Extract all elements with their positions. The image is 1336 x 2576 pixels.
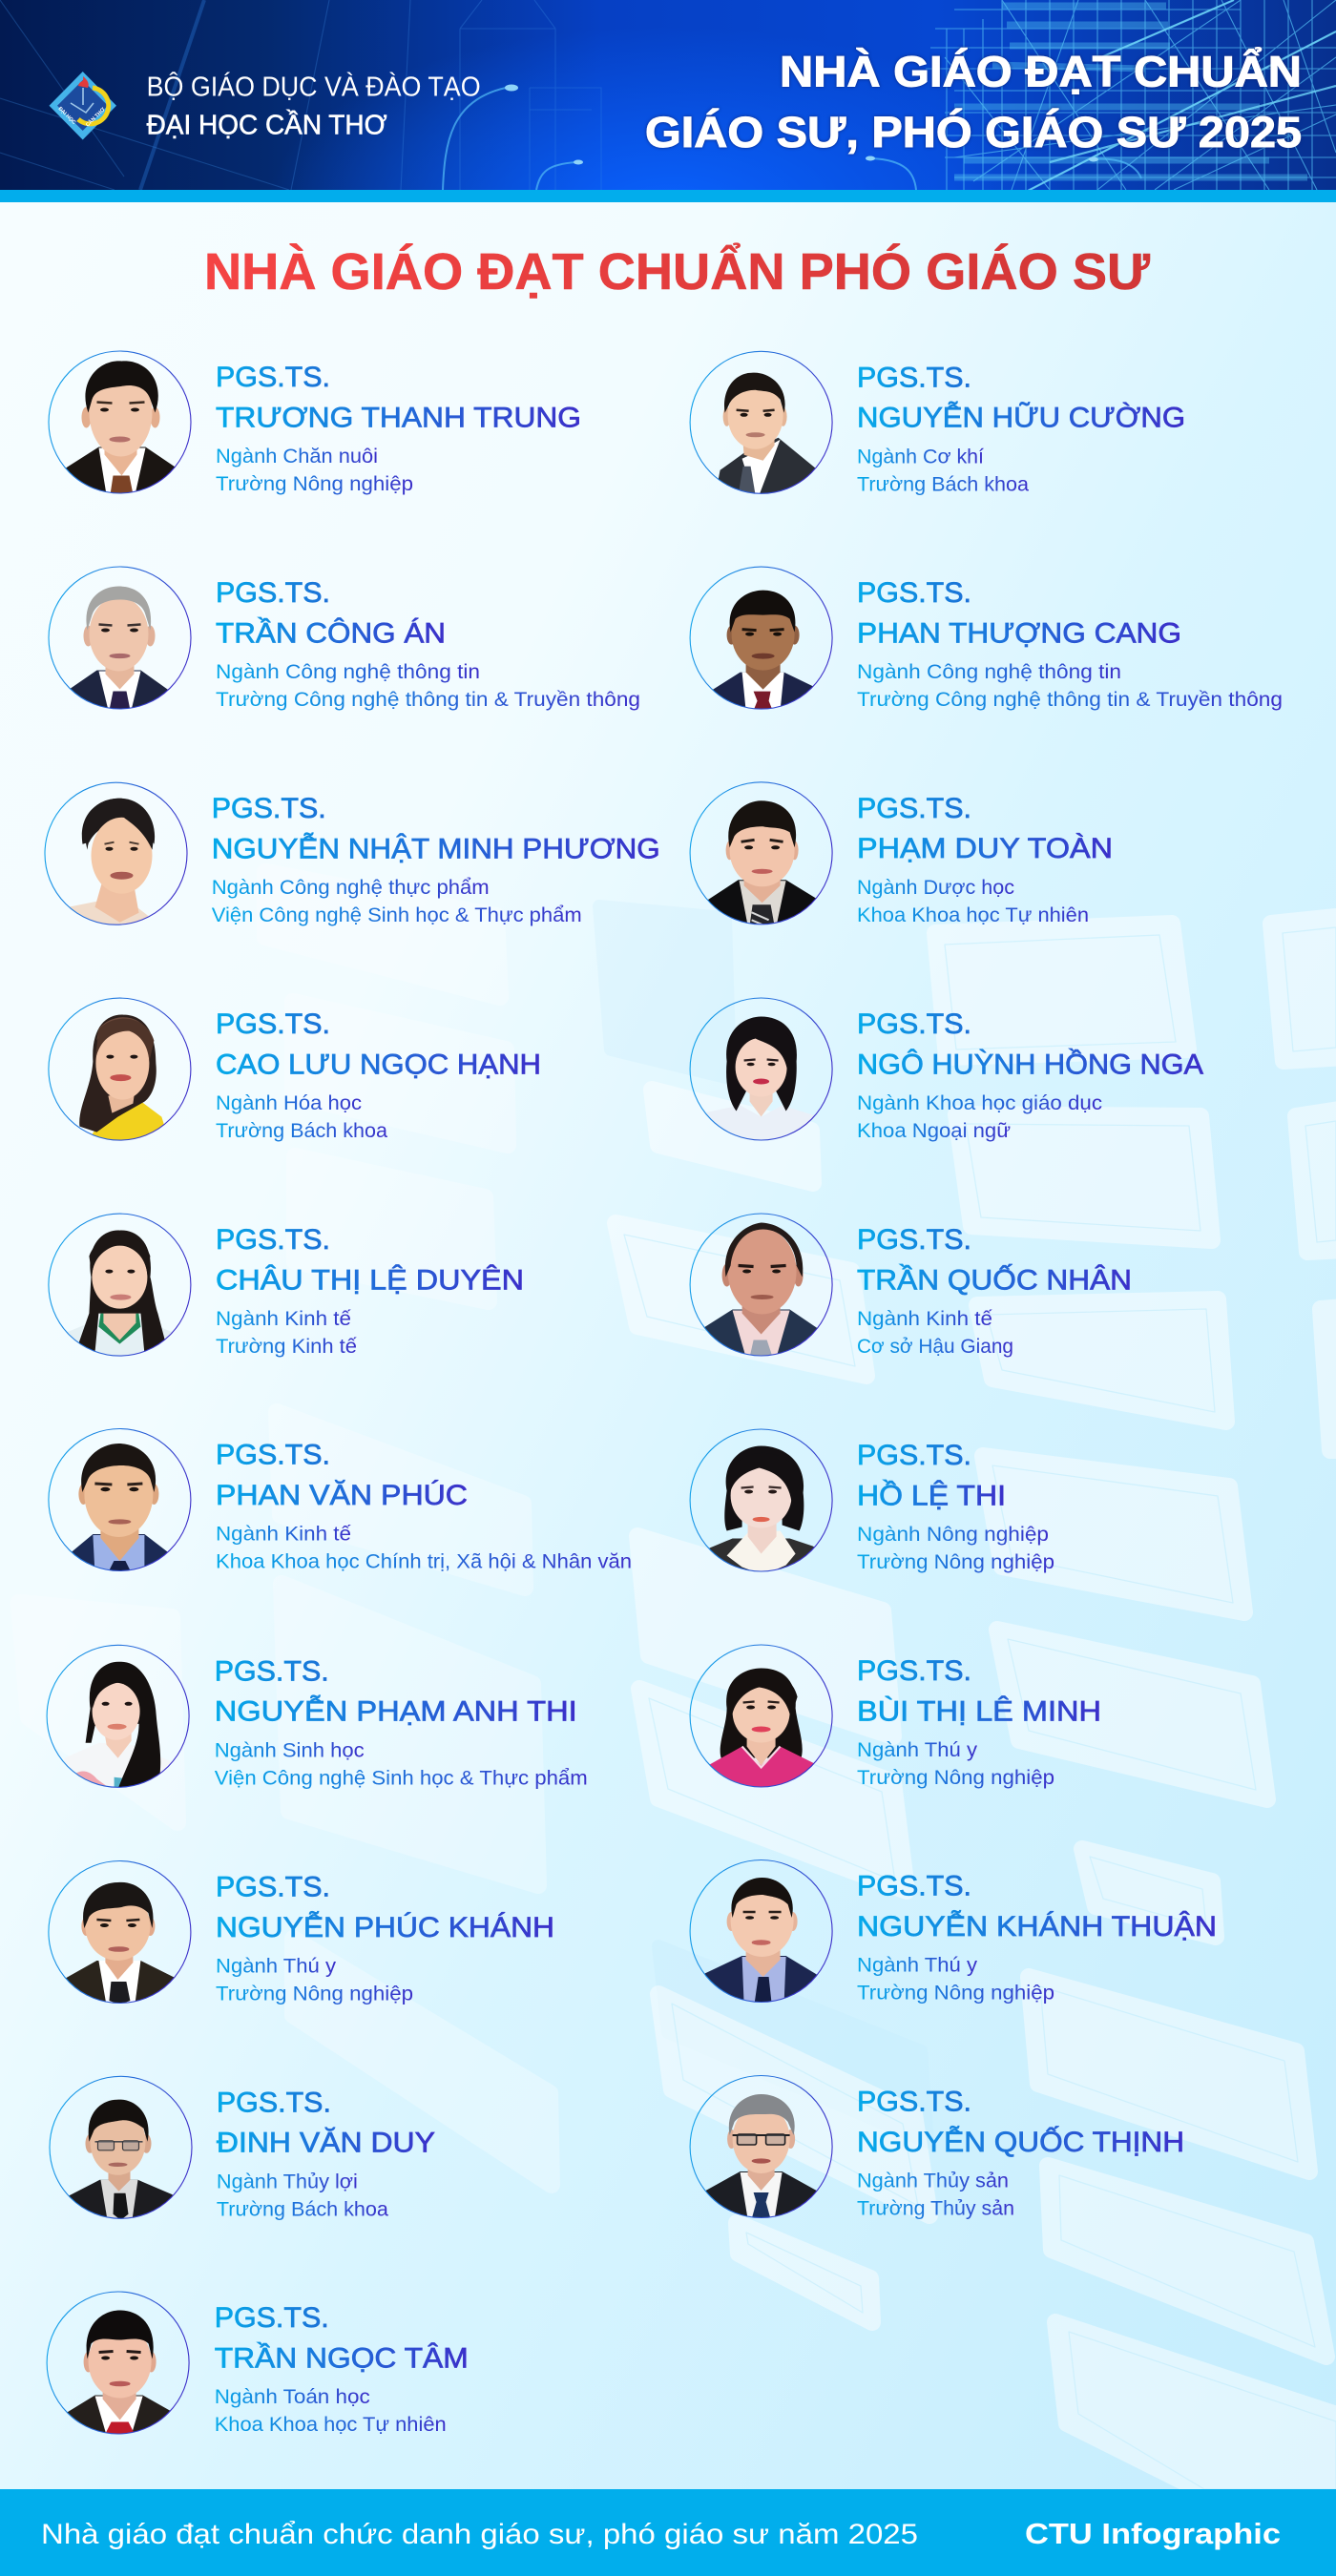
person: Hồ Lệ Thi [690, 1429, 1054, 1573]
footer brand: CTU Infographic [1025, 2517, 1281, 2550]
text block [857, 577, 1283, 711]
portrait [47, 2292, 190, 2435]
person: Nguyễn Phúc Khánh [48, 1860, 554, 2005]
text block: Ngành Thủy lợi [217, 2171, 358, 2192]
person: Ngô Huỳnh Hồng Nga [690, 998, 1203, 1142]
portrait [48, 1860, 191, 2005]
person: Châu Thị Lệ Duyên [49, 1214, 524, 1358]
header banner [0, 0, 1336, 191]
person: Trần Quốc Nhân [690, 1214, 1132, 1358]
text block: Ngành Công nghệ thực phẩm [212, 877, 490, 899]
portrait [48, 567, 191, 710]
text block: PGS.TS. [215, 1655, 329, 1687]
text block [857, 1008, 1203, 1142]
header title: GIÁO SƯ, PHÓ GIÁO SƯ 2025 [645, 108, 1302, 156]
text block: Ngành Công nghệ thông tin [216, 661, 480, 683]
text block: PGS.TS. [857, 1440, 971, 1471]
header title: NHÀ GIÁO ĐẠT CHUẨN [780, 48, 1302, 96]
person: Nguyễn Quốc Thịnh [690, 2076, 1184, 2219]
portrait [690, 782, 833, 925]
text block: PGS.TS. [216, 1439, 330, 1471]
text block [216, 1224, 524, 1358]
text block: Trường Nông nghiệp [857, 1551, 1054, 1573]
text block: PGS.TS. [216, 362, 330, 393]
person: Cao Lưu Ngọc Hạnh [49, 998, 541, 1142]
text block [216, 577, 640, 711]
icon: university logo: ĐẠI HỌC [57, 106, 76, 126]
text block: NGUYỄN PHẠM ANH THI [215, 1695, 577, 1728]
text block: CHÂU THỊ LỆ DUYÊN [216, 1264, 524, 1296]
portrait [690, 2076, 833, 2219]
text block: Trường Nông nghiệp [216, 473, 413, 495]
portrait [50, 2076, 193, 2220]
text block [857, 1440, 1054, 1573]
text block: PGS.TS. [217, 2087, 331, 2118]
footer bar [0, 2489, 1336, 2576]
portrait [48, 1429, 191, 1572]
portrait [48, 351, 191, 494]
footer caption: Nhà giáo đạt chuẩn chức danh giáo sư, phó giáo sư năm 2025 [41, 2519, 918, 2550]
text block: TRẦN CÔNG ÁN [216, 616, 446, 649]
text block: Trường Bách khoa [217, 2198, 388, 2220]
text block [857, 1224, 1132, 1358]
text block: TRƯƠNG THANH TRUNG [216, 402, 581, 433]
organisation name [147, 71, 481, 141]
portrait [45, 782, 187, 926]
text block [857, 362, 1185, 495]
text block: PGS.TS. [216, 1224, 330, 1256]
portrait [690, 1645, 833, 1788]
header title [645, 48, 1302, 156]
person: Bùi Thị Lê Minh [690, 1645, 1101, 1789]
text block: Viện Công nghệ Sinh học & Thực phẩm [215, 1767, 588, 1789]
text block: Ngành Nông nghiệp [857, 1524, 1049, 1546]
text block: Ngành Kinh tế [216, 1523, 351, 1546]
text block: Ngành Hóa học [216, 1092, 362, 1114]
section heading: NHÀ GIÁO ĐẠT CHUẨN PHÓ GIÁO SƯ [204, 243, 1150, 301]
text block: PGS.TS. [857, 2086, 971, 2118]
text block: PGS.TS. [857, 362, 971, 393]
portrait [690, 1214, 833, 1357]
person: Trần Ngọc Tâm [47, 2292, 469, 2436]
text block: Trường Nông nghiệp [216, 1983, 413, 2005]
text block: PGS.TS. [216, 1872, 330, 1902]
portrait [690, 1429, 833, 1572]
text block [212, 793, 660, 926]
text block: TRẦN NGỌC TÂM [215, 2341, 469, 2374]
person: Nguyễn Hữu Cường [690, 351, 1185, 495]
text block [215, 1655, 588, 1789]
text block: HỒ LỆ THI [857, 1479, 1006, 1511]
text block: PHẠM DUY TOÀN [857, 833, 1113, 864]
text block: PGS.TS. [216, 1008, 330, 1040]
text block: Khoa Khoa học Chính trị, Xã hội & Nhân văn [216, 1551, 632, 1572]
text block: Trường Nông nghiệp [857, 1767, 1054, 1789]
text block: Ngành Kinh tế [857, 1308, 992, 1330]
text block: NGUYỄN NHẬT MINH PHƯƠNG [212, 833, 660, 865]
organisation name: BỘ GIÁO DỤC VÀ ĐÀO TẠO [147, 71, 481, 103]
person: Phạm Duy Toàn [690, 782, 1113, 926]
portrait [690, 567, 833, 711]
text block: Ngành Thú y [857, 1954, 978, 1977]
text block: Ngành Thủy sản [857, 2170, 1009, 2192]
text block: Ngành Toán học [215, 2386, 370, 2408]
text block: ĐINH VĂN DUY [217, 2128, 435, 2159]
text block: Trường Công nghệ thông tin & Truyền thông [857, 689, 1283, 711]
organisation name: ĐẠI HỌC CẦN THƠ [147, 109, 387, 141]
text block: BÙI THỊ LÊ MINH [857, 1695, 1101, 1727]
person: Phan Thượng Cang [690, 567, 1283, 711]
text block [857, 1655, 1101, 1789]
text block: NGUYỄN KHÁNH THUẬN [857, 1910, 1217, 1942]
text block: Khoa Khoa học Tự nhiên [857, 904, 1089, 926]
text block: Viện Công nghệ Sinh học & Thực phẩm [212, 904, 582, 926]
text block: Ngành Cơ khí [857, 446, 984, 467]
text block [216, 1008, 541, 1142]
text block: Ngành Dược học [857, 877, 1014, 899]
icon: university logo: CẦN THƠ [84, 106, 107, 128]
text block: CAO LƯU NGỌC HẠNH [216, 1049, 541, 1080]
person: Đinh Văn Duy [50, 2076, 435, 2220]
text block: Trường Công nghệ thông tin & Truyền thông [216, 689, 640, 711]
text block: PGS.TS. [857, 577, 971, 609]
text block [857, 2086, 1184, 2219]
text block: Ngành Kinh tế [216, 1308, 351, 1330]
text block [216, 1872, 554, 2005]
text block: PGS.TS. [215, 2302, 329, 2334]
person: Nguyễn Khánh Thuận [690, 1860, 1217, 2004]
text block: Trường Thủy sản [857, 2198, 1014, 2219]
portrait [47, 1645, 189, 1789]
person: Nguyễn Nhật Minh Phương [45, 782, 660, 926]
text block [857, 1870, 1217, 2004]
text block: Ngành Sinh học [215, 1739, 365, 1761]
person: Nguyễn Phạm Anh Thi [47, 1645, 588, 1789]
text block: Trường Kinh tế [216, 1336, 357, 1358]
text block: Khoa Khoa học Tự nhiên [215, 2414, 447, 2436]
text block: Ngành Chăn nuôi [216, 446, 378, 467]
icon: university logo [50, 72, 116, 139]
text block: PGS.TS. [857, 1870, 971, 1902]
text block: Khoa Ngoại ngữ [857, 1120, 1011, 1142]
text block: Ngành Công nghệ thông tin [857, 661, 1121, 683]
street lamps [443, 88, 1141, 190]
text block [216, 1439, 632, 1572]
portrait [49, 1214, 191, 1358]
text block: NGUYỄN HỮU CƯỜNG [857, 402, 1185, 434]
header wireframe building [0, 0, 1336, 191]
text block: PGS.TS. [857, 1008, 971, 1040]
text block: PGS.TS. [857, 1655, 971, 1687]
text block [217, 2087, 435, 2220]
text block: Ngành Khoa học giáo dục [857, 1092, 1102, 1114]
portrait [690, 1860, 833, 2004]
text block: NGUYỄN QUỐC THỊNH [857, 2126, 1184, 2158]
portrait [690, 998, 832, 1141]
portrait [690, 351, 832, 495]
text block: Trường Bách khoa [216, 1120, 387, 1142]
text block: PGS.TS. [216, 577, 330, 609]
text block: Trường Bách khoa [857, 473, 1029, 495]
background pattern: translucent rounded cards [19, 872, 1336, 2489]
text block: Cơ sở Hậu Giang [857, 1336, 1013, 1358]
text block: PHAN VĂN PHÚC [216, 1480, 468, 1511]
text block: TRẦN QUỐC NHÂN [857, 1263, 1132, 1296]
header accent strip [0, 190, 1336, 202]
text block [857, 793, 1113, 926]
text block: Ngành Thú y [216, 1956, 337, 1977]
text block: PGS.TS. [212, 793, 326, 824]
text block: Ngành Thú y [857, 1739, 978, 1761]
text block: NGUYỄN PHÚC KHÁNH [216, 1911, 554, 1943]
person: Trần Công Án [48, 567, 640, 711]
portrait [49, 998, 191, 1142]
text block: PHAN THƯỢNG CANG [857, 617, 1181, 649]
person: Phan Văn Phúc [48, 1429, 632, 1572]
text block [215, 2302, 469, 2436]
text block: PGS.TS. [857, 1224, 971, 1256]
person: Trương Thanh Trung [48, 351, 581, 495]
text block: NGÔ HUỲNH HỒNG NGA [857, 1048, 1203, 1080]
text block: PGS.TS. [857, 793, 971, 824]
text block [216, 362, 581, 495]
text block: Trường Nông nghiệp [857, 1983, 1054, 2004]
